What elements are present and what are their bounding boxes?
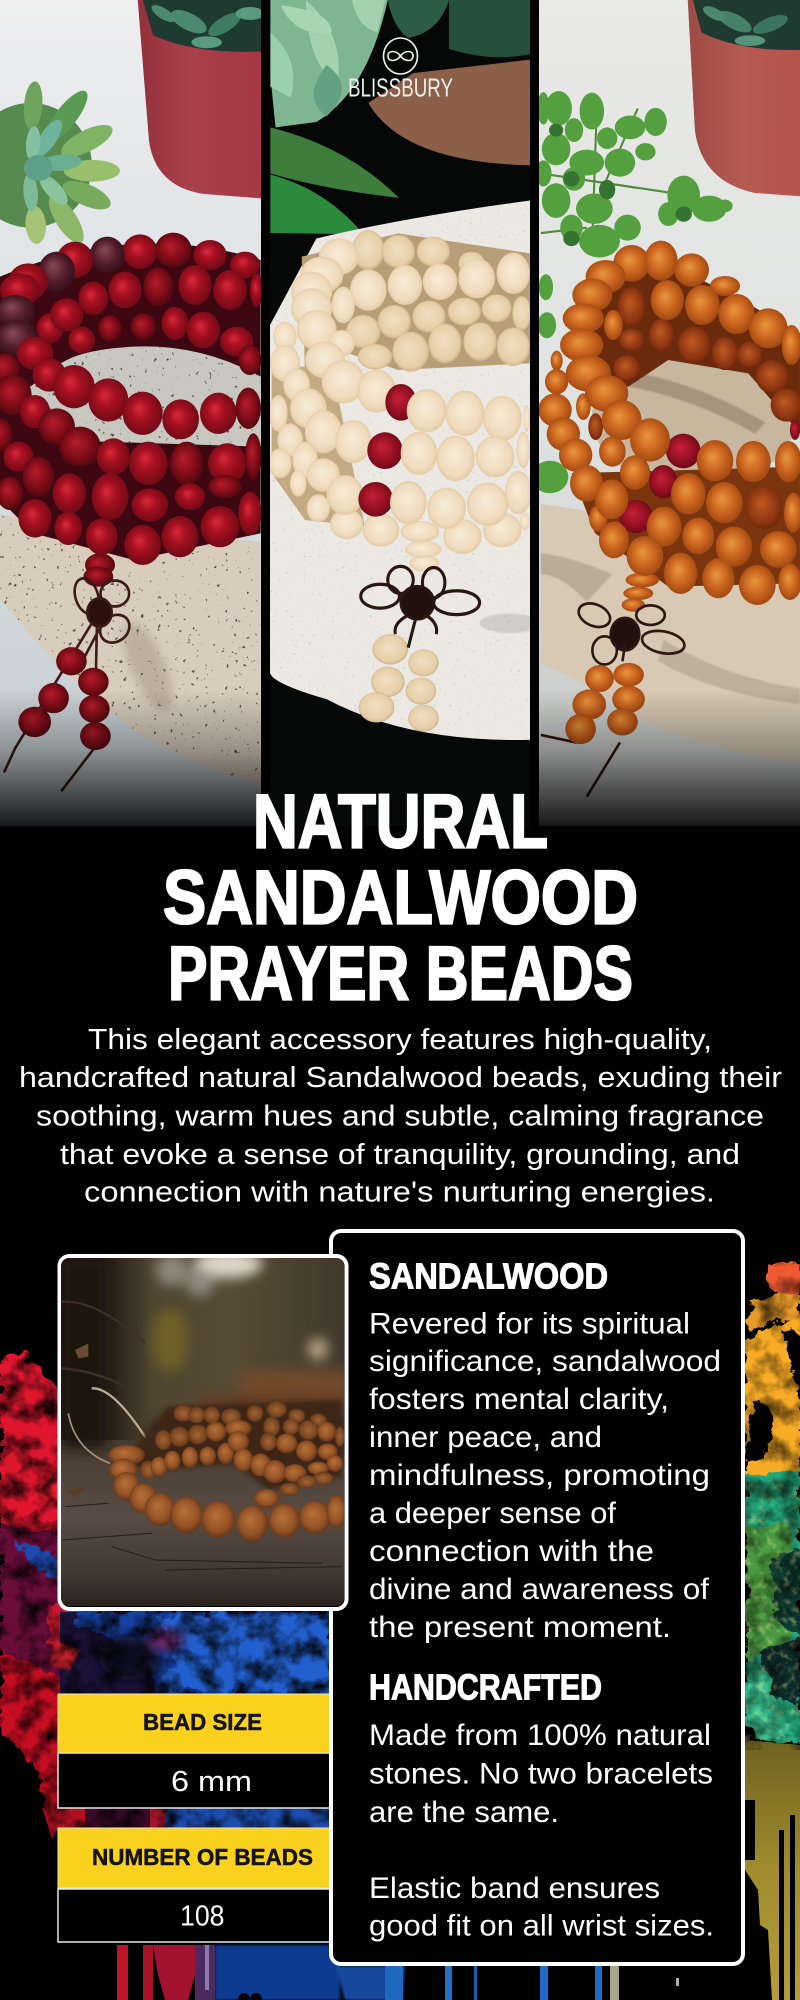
- knot and tassel: cream: [359, 566, 480, 732]
- text: sandalwood description: significance, sandalwood: [369, 1345, 721, 1378]
- intro paragraph: that evoke a sense of tranquility, grounding, and: [60, 1139, 740, 1171]
- text: sandalwood description: the present moment.: [369, 1611, 671, 1644]
- roots: [62, 1302, 342, 1570]
- shadow under bead stack: [122, 1400, 342, 1490]
- colour splash: blue band: [0, 1340, 330, 1850]
- panel: number of beads spec: [58, 1828, 330, 1942]
- beads: orange bracelet: [538, 241, 800, 612]
- beads: cream bracelet: [268, 230, 532, 572]
- text: sandalwood description: fosters mental clarity,: [369, 1383, 669, 1416]
- photo: centre cream sandalwood beads in black frame: [270, 0, 530, 740]
- stone base: [0, 346, 261, 783]
- text: sandalwood description: mindfulness, promoting: [369, 1459, 710, 1492]
- beads: red bracelet: [0, 233, 263, 587]
- icon: red plant pot: [138, 0, 264, 198]
- title: PRAYER BEADS: [168, 932, 633, 1016]
- icon: brown bowl: [368, 60, 530, 165]
- intro paragraph: connection with nature's nurturing energies.: [84, 1176, 715, 1208]
- intro paragraph: soothing, warm hues and subtle, calming fragrance: [36, 1100, 764, 1132]
- title: NATURAL: [253, 780, 548, 864]
- brand logo: [348, 38, 453, 102]
- stone base: [541, 347, 800, 764]
- intro paragraph: [19, 1024, 782, 1208]
- heading: sandalwood: SANDALWOOD: [369, 1256, 608, 1297]
- text: handcrafted description: Elastic band ensures: [369, 1872, 660, 1905]
- text: handcrafted description: are the same.: [369, 1796, 559, 1829]
- text: sandalwood description: a deeper sense of: [369, 1497, 617, 1530]
- icon: green succulent: [0, 81, 120, 249]
- text: sandalwood description: connection with the: [369, 1535, 654, 1568]
- text: sandalwood description: Revered for its spiritual: [369, 1307, 690, 1340]
- panel: number of beads spec: NUMBER OF BEADS: [92, 1844, 313, 1870]
- text: handcrafted description: [369, 1719, 714, 1942]
- text: sandalwood description: divine and awareness of: [369, 1573, 710, 1606]
- text: sandalwood description: inner peace, and: [369, 1421, 602, 1454]
- colour splash: left side: [0, 1348, 330, 1840]
- text: handcrafted description: good fit on all wrist sizes.: [369, 1909, 714, 1942]
- title: [163, 780, 638, 1016]
- knot and tassel: orange: [541, 599, 686, 797]
- panel: bead size spec: [58, 1694, 330, 1808]
- panel: bead size spec: 6 mm: [171, 1766, 252, 1798]
- brand logo: BLISSBURY: [348, 72, 453, 102]
- icon: green leafy sprig: [532, 91, 733, 493]
- panel: description card: [331, 1231, 743, 1964]
- photo: right orange sandalwood beads: [532, 0, 800, 829]
- colour splash: right side: [745, 1260, 800, 2000]
- panel: number of beads spec: 108: [180, 1900, 224, 1932]
- icon: green leaves: [270, 0, 449, 234]
- colour splash: bottom drips: [117, 1945, 679, 2000]
- white knit cloth: [270, 201, 541, 743]
- icon: dark foliage: [449, 0, 530, 57]
- text: sandalwood description: [369, 1307, 721, 1644]
- bottom fade over side photos: [0, 690, 800, 826]
- title: SANDALWOOD: [163, 856, 638, 940]
- intro paragraph: This elegant accessory features high-quality,: [88, 1024, 712, 1056]
- knot and tassel: red: [4, 575, 134, 791]
- panel: bead size spec: BEAD SIZE: [143, 1709, 262, 1735]
- heading: handcrafted: HANDCRAFTED: [369, 1667, 602, 1708]
- panel: wooden beads photo: [60, 1250, 350, 1610]
- text: handcrafted description: stones. No two bracelets: [369, 1758, 713, 1791]
- photo: red sandalwood beads: [0, 0, 261, 826]
- intro paragraph: handcrafted natural Sandalwood beads, exuding their: [19, 1062, 782, 1094]
- icon: terracotta plant pot: [688, 0, 800, 196]
- icon: infinity in circle: [384, 38, 418, 74]
- text: handcrafted description: Made from 100% natural: [369, 1719, 711, 1752]
